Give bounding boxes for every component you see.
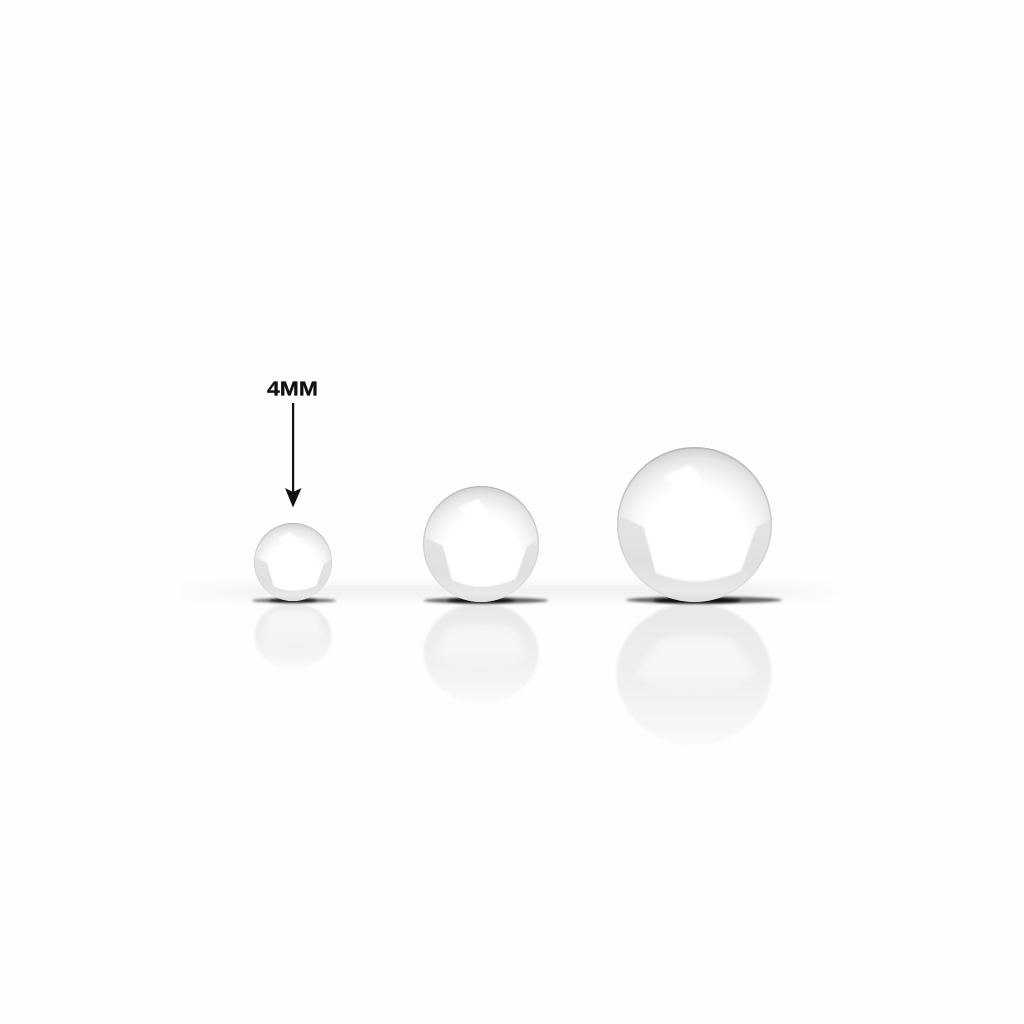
sphere large xyxy=(614,447,775,605)
reflection large xyxy=(616,603,772,745)
arrow xyxy=(285,403,302,508)
label text: 4MM xyxy=(267,378,318,400)
sphere medium xyxy=(421,486,541,604)
ground haze xyxy=(170,584,850,599)
shadow large xyxy=(626,597,782,603)
reflection medium xyxy=(424,603,538,703)
label 4MM with arrow xyxy=(267,378,318,508)
sphere small xyxy=(252,523,334,603)
reflection small xyxy=(254,603,332,669)
shadow medium xyxy=(424,598,548,604)
sphere medium with shadow and reflection xyxy=(421,486,548,703)
shadow small xyxy=(252,598,336,603)
sphere 4mm with shadow and reflection xyxy=(252,523,336,669)
sphere large with shadow and reflection xyxy=(614,447,782,745)
